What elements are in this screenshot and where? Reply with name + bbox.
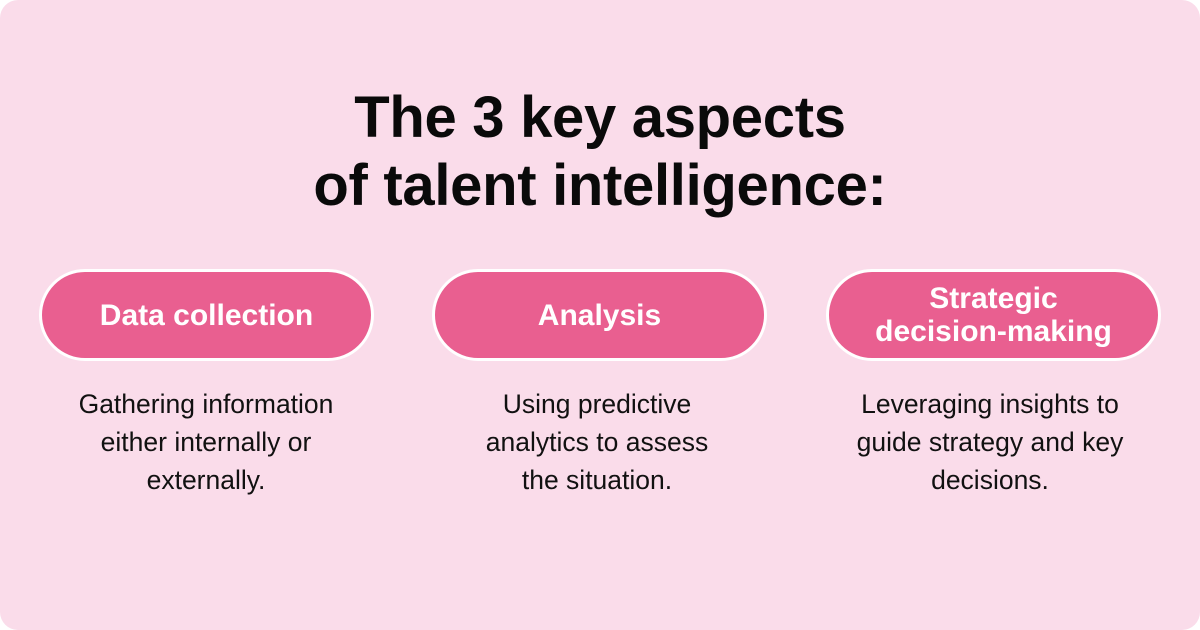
pill: strategic decision-making: decision-making [875,315,1112,348]
text: data collection description [79,389,333,495]
text: strategic decision-making description: guide strategy and key [857,427,1123,457]
text: analysis description [486,389,708,495]
text: data collection description: externally. [147,465,265,495]
pill: analysis [432,269,767,361]
text: data collection description: Gathering information [79,389,333,419]
pill: data collection [39,269,374,361]
text: strategic decision-making description: decisions. [931,465,1049,495]
text: data collection description: either internally or [101,427,311,457]
title [313,85,887,218]
title: of talent intelligence: [313,153,887,218]
text: analysis description: the situation. [522,465,672,495]
title: The 3 key aspects [354,85,846,150]
text: analysis description: analytics to assess [486,427,708,457]
pill: strategic decision-making [826,269,1161,361]
pill: data collection: Data collection [100,298,313,332]
text: analysis description: Using predictive [503,389,691,419]
pill: strategic decision-making: Strategic [929,282,1058,315]
text: strategic decision-making description [857,389,1124,495]
text: strategic decision-making description: Leveraging insights to [861,389,1119,419]
pill: analysis: Analysis [538,298,661,332]
